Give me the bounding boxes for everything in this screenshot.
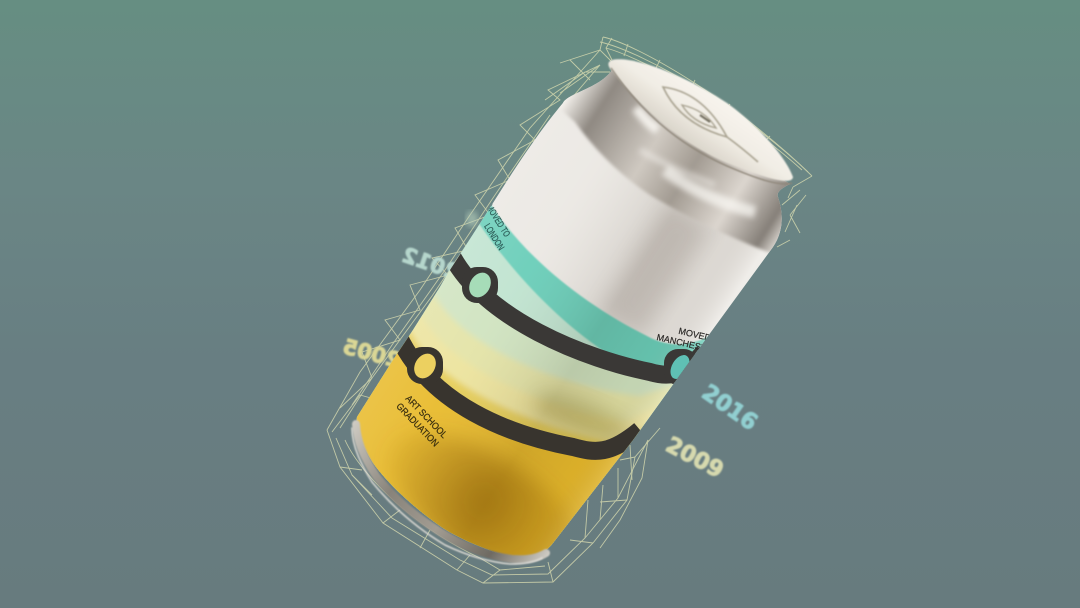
- bottom rim highlight: [352, 428, 542, 564]
- mint band: [356, 224, 674, 546]
- can lid: [608, 59, 793, 184]
- neck highlights: [636, 108, 755, 212]
- timeline line upper: [448, 248, 704, 375]
- silver shade streak: [620, 215, 690, 325]
- stop marker 2012: [462, 267, 498, 303]
- year label: 2016: 2016: [697, 380, 761, 436]
- label: moved to Manchester: MOVED TO: [678, 326, 726, 346]
- year label: 2012 (mirrored, behind can): 2012: [399, 243, 462, 285]
- label: art school graduation: GRADUATION: [394, 401, 441, 449]
- bottom rim: [356, 424, 546, 559]
- label: moved to Manchester: MANCHESTER: [656, 332, 720, 356]
- year label: 2009: 2009: [661, 433, 727, 484]
- can: [350, 58, 794, 566]
- pale green band: [356, 270, 680, 551]
- neck: [558, 70, 790, 254]
- cylinder shading: [356, 187, 768, 554]
- label: art school graduation: ART SCHOOL: [403, 393, 449, 440]
- wireframe cage: [327, 37, 812, 583]
- bright yellow bottom: [356, 348, 628, 556]
- ghost digit behind can: [466, 211, 478, 227]
- year label: 2005 (mirrored, behind can): 2005: [340, 335, 403, 373]
- silver upper body: [356, 70, 790, 549]
- timeline line lower: [398, 335, 640, 451]
- label: moved to London: LONDON: [482, 222, 506, 252]
- teal band: [389, 205, 708, 366]
- gold shadow: [392, 431, 572, 556]
- stop marker 2016: [664, 349, 695, 384]
- lid rim shadow: [611, 68, 792, 184]
- label: moved to London: MOVED TO: [484, 203, 512, 239]
- olive shade above lower line: [530, 386, 638, 442]
- can body with timeline bands: [356, 70, 790, 556]
- stop marker 2005: [407, 347, 443, 384]
- pull tab: [663, 87, 758, 162]
